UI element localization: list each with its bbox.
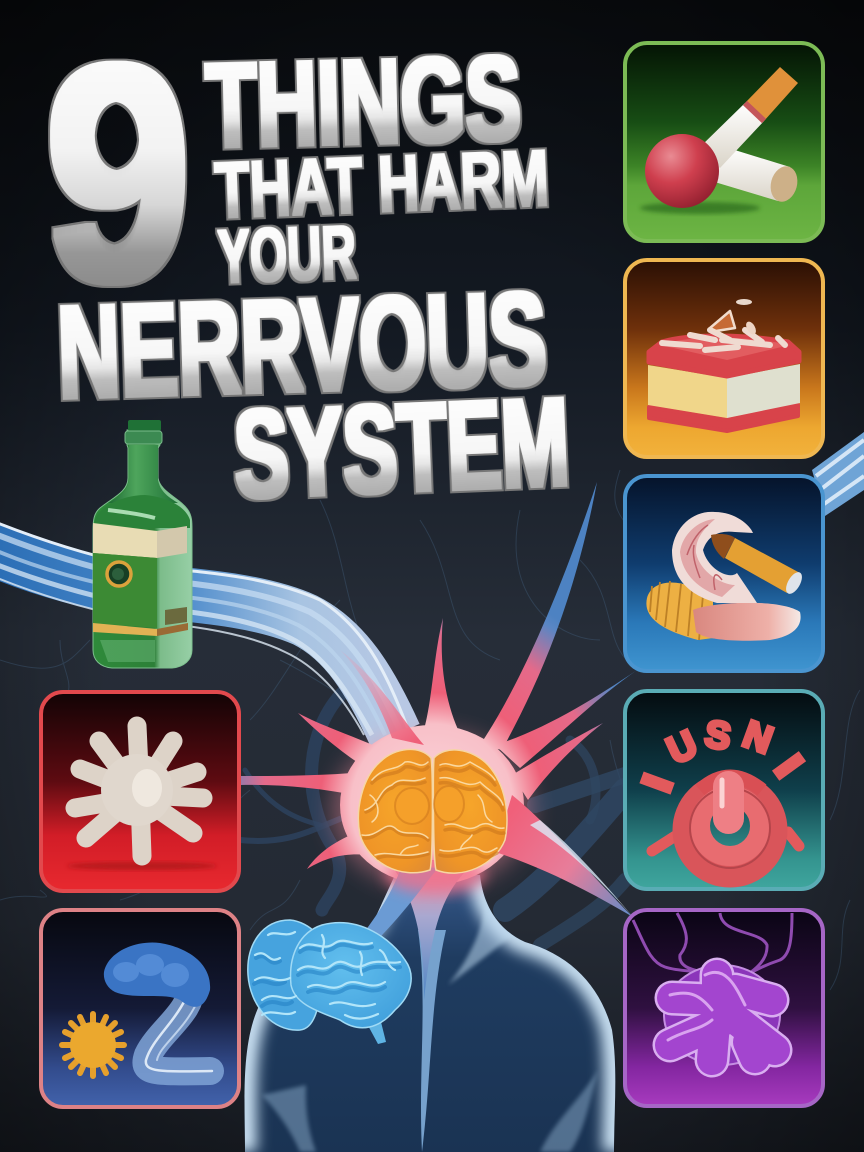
dark background nerve trunks: [240, 690, 625, 945]
title line: THAT HARM: THAT HARM: [213, 133, 550, 235]
title: [45, 2, 572, 525]
panel: cake: [625, 260, 823, 457]
icon: wires: [633, 913, 792, 976]
title line: YOUR: YOUR: [217, 210, 358, 300]
panel: power ring with letters: [625, 691, 823, 889]
letters: N: [738, 714, 778, 762]
icon: rings: [684, 776, 776, 876]
panel: cigarette and ball: [625, 43, 823, 241]
icon: cigarette butt: [708, 147, 801, 205]
panel: blue brain tube and yellow virus: [41, 910, 239, 1107]
bottle label: [93, 523, 188, 636]
glass nerve tube right top: [812, 432, 864, 516]
icon: blue blob: [104, 943, 210, 1007]
icon: cigarette in meat: [711, 534, 805, 596]
letters: I: [768, 750, 808, 783]
orange brain: [358, 749, 507, 873]
title line: SYSTEM: SYSTEM: [232, 373, 572, 525]
panel: white microbe: [41, 692, 239, 891]
letters: S: [702, 713, 733, 759]
icon: tongue: [713, 771, 744, 834]
icon: cigarette upright: [700, 67, 798, 168]
icon: red ball: [645, 134, 719, 208]
title line: THINGS: THINGS: [204, 31, 523, 173]
icon: layered cake: [648, 299, 800, 431]
neuron star with spikes: [240, 482, 640, 1000]
icon: meat ribbon: [672, 512, 757, 603]
icon: tube figure two: [146, 985, 212, 1071]
human body silhouette: [245, 875, 615, 1152]
panel: purple blob with wires: [625, 910, 823, 1106]
glass nerve tube left: [0, 520, 410, 735]
letters: U: [661, 723, 704, 773]
letters: [635, 713, 808, 795]
panel: meat and cigarette: [625, 476, 823, 671]
blue brain: [248, 920, 411, 1044]
title line: NERRVOUS: NERRVOUS: [55, 265, 549, 426]
icon: side bars: [652, 832, 799, 851]
bottle: [93, 420, 192, 668]
icon: yellow virus: [62, 1014, 124, 1076]
icon: purple blob: [664, 965, 780, 1065]
letters: I: [635, 771, 678, 795]
icon: yellow coil: [646, 581, 713, 640]
title numeral 9: 9: [45, 2, 191, 345]
icon: meat base: [693, 603, 801, 641]
icon: microbe: [75, 726, 203, 856]
faint background nerve fibres: [0, 470, 860, 990]
